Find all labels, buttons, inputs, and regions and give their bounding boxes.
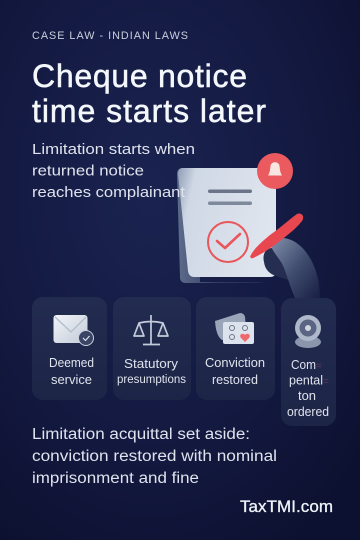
title [32,58,266,129]
illustration: document with bell and pen [177,153,320,300]
card: Compensation ordered [281,298,336,426]
document back sheet [177,168,264,283]
red pen [250,214,303,258]
title: time starts later [32,93,266,129]
document sheet [178,168,276,277]
card label [49,356,94,387]
icon: envelope [54,315,94,346]
icon: cards [215,313,254,344]
card label: presumptions [117,374,186,386]
title: Cheque notice [32,58,247,94]
lead text: returned notice [32,162,144,180]
card label: Statutory [124,357,179,371]
card label: restored [212,373,258,387]
card label: = [316,361,322,372]
bell badge [257,153,293,189]
card label: pental [289,374,323,388]
card label: Deemed [49,356,94,370]
card: Deemed service [32,297,107,400]
hand [263,236,320,300]
card label [205,356,265,387]
lead text: Limitation starts when [32,141,195,158]
card: Statutory presumptions [113,297,191,400]
card label: Com [291,358,316,372]
document lines [208,190,252,205]
card: Conviction restored [196,297,275,400]
brand: TaxTMI.com: TaxTMI.com [240,497,333,516]
card label [117,357,186,386]
card label: service [51,373,92,387]
check mark circle [208,222,248,262]
lead text [32,141,195,201]
summary text: imprisonment and fine [32,470,199,487]
icon: scales of justice [134,315,168,344]
card label: = [323,376,329,388]
card label: Conviction [205,356,265,370]
lead text: reaches complainant [32,184,186,201]
card label [287,358,329,419]
icon: coin [295,315,321,348]
summary text: conviction restored with nominal [32,448,277,465]
summary text: Limitation acquittal set aside: [32,426,250,443]
eyebrow label: CASE LAW - INDIAN LAWS [32,30,188,42]
card label: ordered [287,405,329,419]
card label: ton [298,389,316,403]
summary text [32,426,277,487]
